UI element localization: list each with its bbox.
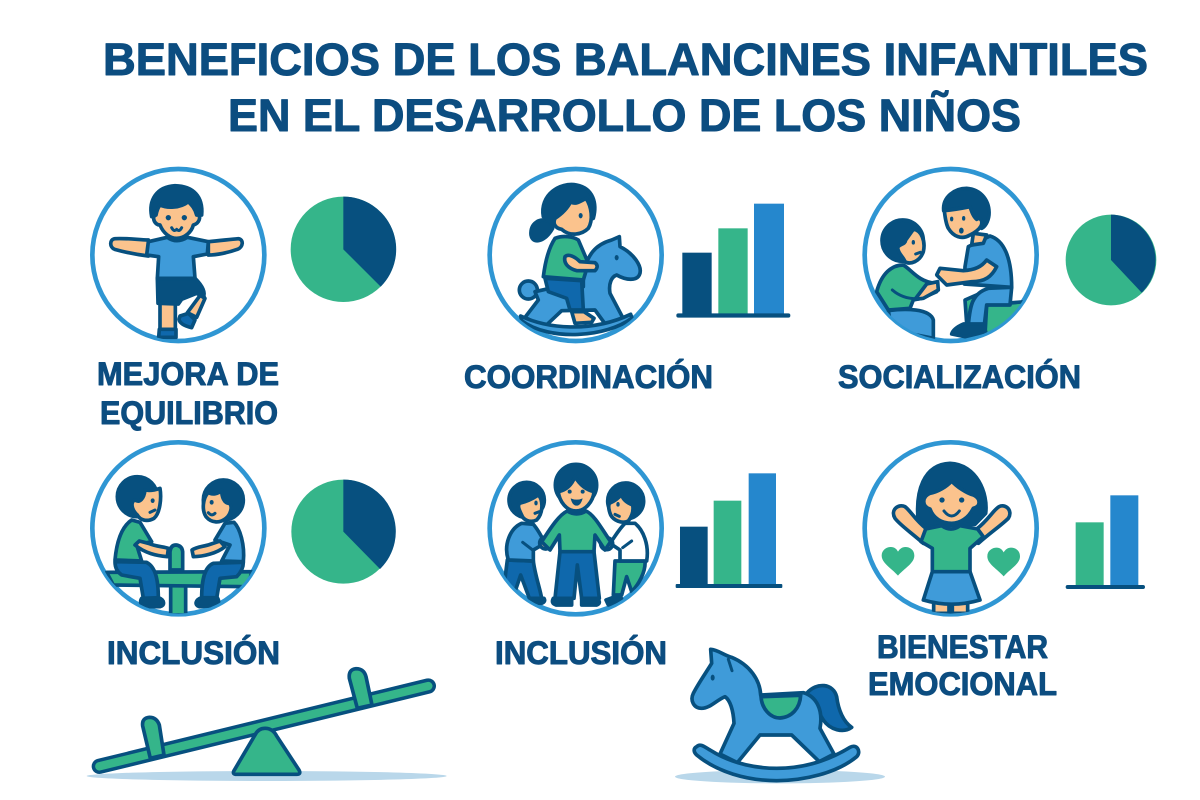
- title: BENEFICIOS DE LOS BALANCINES INFANTILES: [103, 34, 1148, 85]
- panel: mejora de equilibrio: [92, 169, 396, 431]
- icon: two children on seesaw: [92, 442, 264, 615]
- label: mejora de equilibrio: MEJORA DE: [97, 356, 279, 392]
- panel: bienestar emocional: [865, 442, 1145, 702]
- label: inclusión: INCLUSIÓN: [107, 635, 280, 671]
- title: EN EL DESARROLLO DE LOS NIÑOS: [228, 90, 1021, 141]
- pie chart: inclusión: [291, 480, 396, 584]
- icon: two children holding hands: [865, 169, 1037, 341]
- label: bienestar emocional: BIENESTAR: [877, 629, 1048, 665]
- panel: socialización: [838, 169, 1156, 395]
- label: socialización: SOCIALIZACIÓN: [838, 359, 1081, 395]
- illustration: rocking horse: [675, 649, 885, 783]
- panel: inclusión group: [490, 442, 782, 671]
- bar chart: coordinación: [676, 204, 790, 318]
- label: coordinación: COORDINACIÓN: [464, 359, 713, 395]
- label: bienestar emocional: EMOCIONAL: [868, 666, 1057, 702]
- panel: coordinación: [464, 169, 790, 395]
- icon: girl on rocking horse: [490, 169, 662, 341]
- label: bienestar emocional: [868, 629, 1057, 702]
- bar chart: inclusión: [676, 473, 782, 588]
- title: [103, 34, 1148, 141]
- pie chart: socialización: [1066, 215, 1156, 305]
- label: mejora de equilibrio: [97, 356, 279, 431]
- icon: boy balancing: [92, 169, 264, 341]
- panel: inclusión seesaw: [92, 442, 396, 671]
- label: mejora de equilibrio: EQUILIBRIO: [100, 395, 278, 431]
- bar chart: bienestar: [1066, 495, 1145, 589]
- pie chart: equilibrio: [291, 197, 396, 302]
- icon: three children holding hands: [490, 442, 662, 614]
- illustration: seesaw: [87, 669, 447, 781]
- label: inclusión: INCLUSIÓN: [495, 635, 667, 671]
- icon: happy girl with hearts: [865, 442, 1037, 614]
